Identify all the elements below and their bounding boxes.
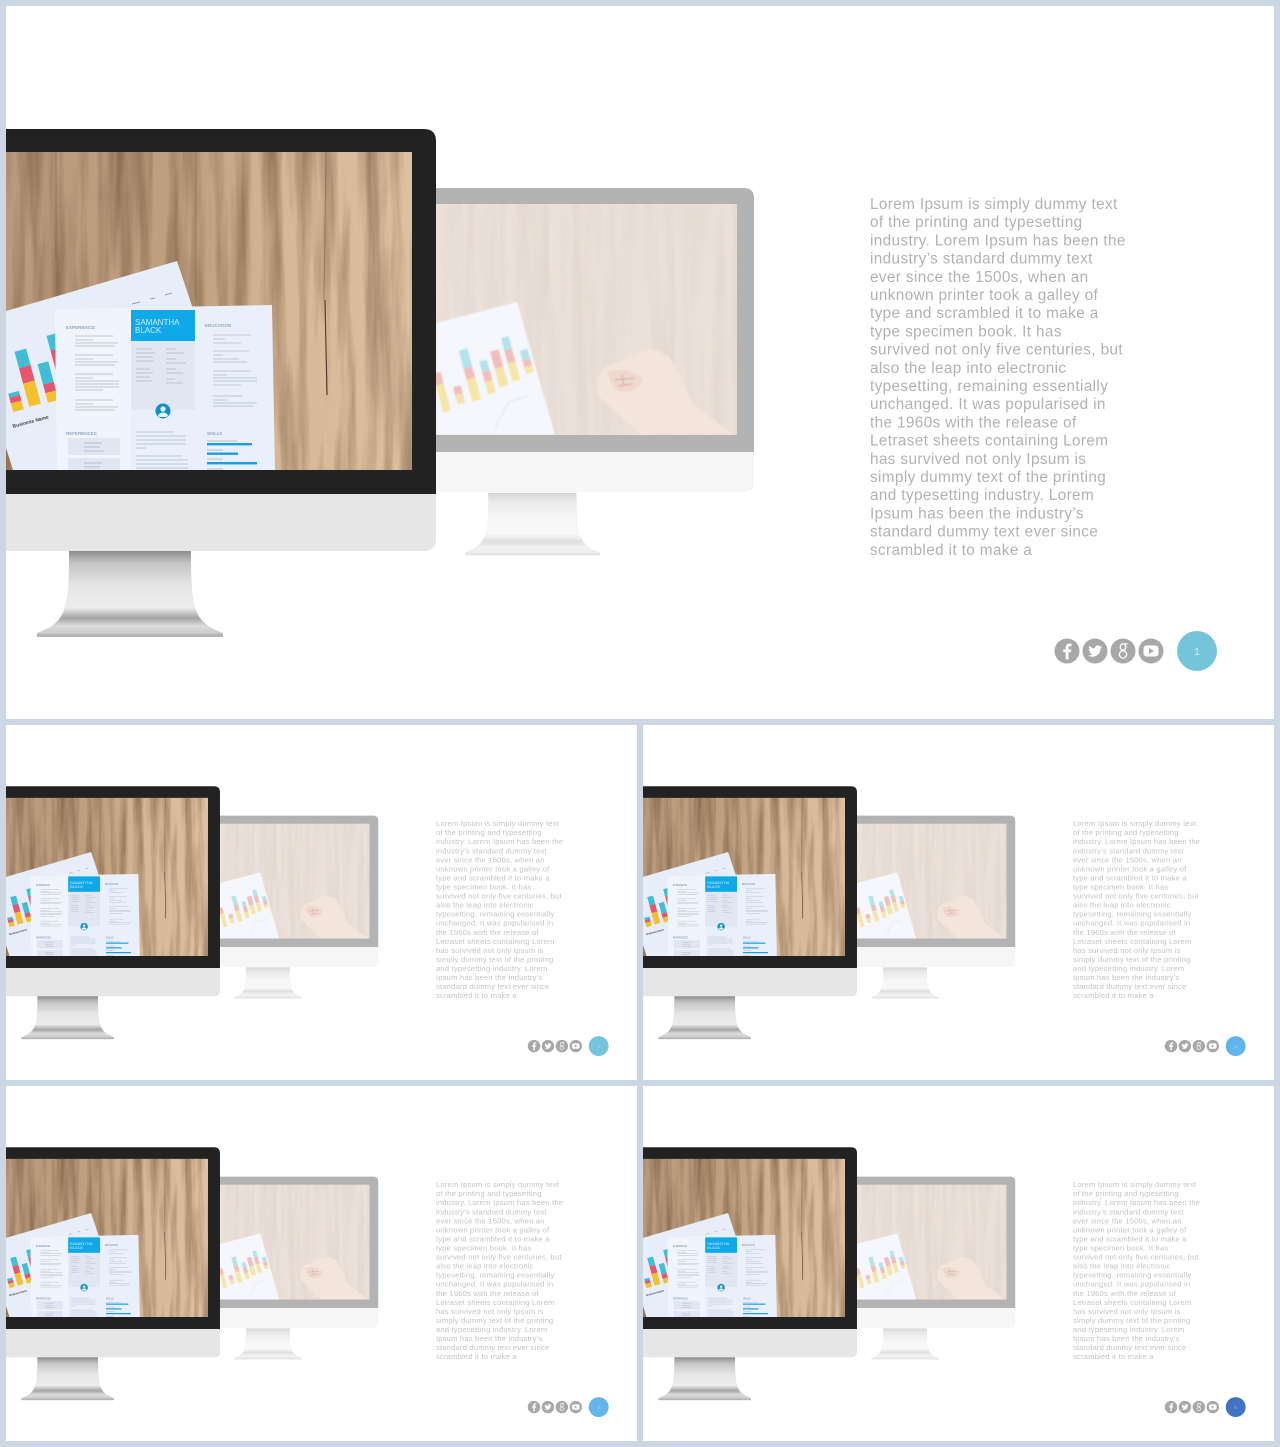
text block: has survived not only Ipsum is [436, 946, 544, 955]
text block: scrambled it to make a [436, 991, 517, 1000]
text block: type and scrambled it to make a [870, 305, 1099, 322]
text block: also the leap into electronic [1073, 1262, 1171, 1271]
page badge [1226, 1397, 1246, 1417]
text block: has survived not only Ipsum is [436, 1307, 544, 1316]
text block: of the printing and typesetting [870, 214, 1082, 231]
text block: Lorem Ipsum is simply dummy text [436, 819, 560, 828]
page badge: 1 [1194, 647, 1200, 658]
text block: Lorem Ipsum is simply dummy text [870, 196, 1118, 213]
text block: simply dummy text of the printing [1073, 1316, 1190, 1325]
text block: the 1960s with the release of [436, 928, 539, 937]
icons: social media [528, 1040, 582, 1052]
text block: simply dummy text of the printing [436, 955, 553, 964]
text block: Ipsum has been the industry’s [436, 1334, 542, 1343]
monitors with wood desk photo [0, 786, 378, 1039]
text block: industry. Lorem Ipsum has been the [436, 837, 563, 846]
text block: industry’s standard dummy text [436, 846, 547, 855]
text block: survived not only five centuries, but [1073, 892, 1200, 901]
page badge [1177, 631, 1217, 671]
text block: also the leap into electronic [870, 360, 1066, 377]
text block: Lorem Ipsum is simply dummy text [1073, 1180, 1197, 1189]
text block: ever since the 1500s, when an [436, 1216, 545, 1225]
monitors with wood desk photo [635, 1147, 1015, 1400]
text block: industry’s standard dummy text [436, 1207, 547, 1216]
page badge: 5 [1234, 1405, 1237, 1411]
text block: simply dummy text of the printing [1073, 955, 1190, 964]
text block: and typesetting industry. Lorem [1073, 964, 1184, 973]
text block: industry’s standard dummy text [870, 251, 1093, 268]
panel: main slide [6, 6, 1274, 719]
text block: scrambled it to make a [1073, 991, 1154, 1000]
text block: type specimen book. It has [870, 323, 1062, 340]
text block: industry. Lorem Ipsum has been the [1073, 837, 1200, 846]
text block: unchanged. It was popularised in [1073, 919, 1190, 928]
text block: survived not only five centuries, but [1073, 1253, 1200, 1262]
text block: typesetting, remaining essentially [870, 378, 1108, 395]
text block: standard dummy text ever since [436, 1343, 549, 1352]
text block: unchanged. It was popularised in [436, 919, 553, 928]
text block: type specimen book. It has [1073, 1244, 1168, 1253]
text block: industry’s standard dummy text [1073, 1207, 1184, 1216]
text block: typesetting, remaining essentially [1073, 1271, 1191, 1280]
text block: simply dummy text of the printing [870, 469, 1106, 486]
text block: typesetting, remaining essentially [1073, 910, 1191, 919]
text block: also the leap into electronic [1073, 901, 1171, 910]
text block: unchanged. It was popularised in [870, 396, 1106, 413]
text block: has survived not only Ipsum is [1073, 946, 1181, 955]
text block: scrambled it to make a [436, 1352, 517, 1361]
text block: typesetting, remaining essentially [436, 910, 554, 919]
text block: type and scrambled it to make a [1073, 1234, 1187, 1243]
text block: unchanged. It was popularised in [436, 1280, 553, 1289]
text block: typesetting, remaining essentially [436, 1271, 554, 1280]
text block: survived not only five centuries, but [436, 892, 563, 901]
text block: type specimen book. It has [436, 1244, 531, 1253]
text block: the 1960s with the release of [870, 414, 1077, 431]
text block: unchanged. It was popularised in [1073, 1280, 1190, 1289]
text block: Ipsum has been the industry’s [870, 505, 1084, 522]
text block: Letraset sheets containing Lorem [436, 1298, 555, 1307]
text block: scrambled it to make a [870, 542, 1032, 559]
monitors with wood desk photo [0, 129, 754, 637]
text block: of the printing and typesetting [436, 828, 542, 837]
icons: social media [528, 1401, 582, 1413]
page badge: 4 [597, 1405, 600, 1411]
text block: Lorem Ipsum is simply dummy text [1073, 819, 1197, 828]
text block: survived not only five centuries, but [870, 342, 1123, 359]
icons: social media [1165, 1040, 1219, 1052]
text block: unknown printer took a galley of [1073, 1225, 1187, 1234]
text block: unknown printer took a galley of [870, 287, 1099, 304]
text block: of the printing and typesetting [1073, 1189, 1179, 1198]
text block: type and scrambled it to make a [436, 873, 550, 882]
panel: slide 5 [643, 1086, 1274, 1441]
text block: unknown printer took a galley of [436, 1225, 550, 1234]
text block: unknown printer took a galley of [1073, 864, 1187, 873]
text block: also the leap into electronic [436, 901, 534, 910]
text block: Letraset sheets containing Lorem [1073, 1298, 1192, 1307]
text block: simply dummy text of the printing [436, 1316, 553, 1325]
text block: and typesetting industry. Lorem [436, 964, 547, 973]
text block: Letraset sheets containing Lorem [1073, 937, 1192, 946]
text block: unknown printer took a galley of [436, 864, 550, 873]
text block: industry. Lorem Ipsum has been the [436, 1198, 563, 1207]
text block: type specimen book. It has [1073, 883, 1168, 892]
text block: the 1960s with the release of [1073, 928, 1176, 937]
text block: standard dummy text ever since [1073, 1343, 1186, 1352]
text block: the 1960s with the release of [1073, 1289, 1176, 1298]
icons: social media [1054, 638, 1164, 664]
page badge [1226, 1036, 1246, 1056]
text block: and typesetting industry. Lorem [870, 487, 1094, 504]
text block: Ipsum has been the industry’s [1073, 973, 1179, 982]
panel: slide 2 [6, 725, 637, 1080]
text block: the 1960s with the release of [436, 1289, 539, 1298]
text block: Ipsum has been the industry’s [436, 973, 542, 982]
text block: type and scrambled it to make a [436, 1234, 550, 1243]
text block: ever since the 1500s, when an [870, 269, 1089, 286]
text block: scrambled it to make a [1073, 1352, 1154, 1361]
text block: survived not only five centuries, but [436, 1253, 563, 1262]
text block: has survived not only Ipsum is [870, 451, 1086, 468]
page badge [589, 1036, 609, 1056]
text block: industry’s standard dummy text [1073, 846, 1184, 855]
panel: slide 3 [643, 725, 1274, 1080]
text block: ever since the 1500s, when an [1073, 1216, 1182, 1225]
text block: has survived not only Ipsum is [1073, 1307, 1181, 1316]
text block: and typesetting industry. Lorem [1073, 1325, 1184, 1334]
text block: standard dummy text ever since [870, 524, 1098, 541]
page badge: 3 [1234, 1044, 1237, 1050]
text block: standard dummy text ever since [1073, 982, 1186, 991]
monitors with wood desk photo [635, 786, 1015, 1039]
text block: of the printing and typesetting [436, 1189, 542, 1198]
text block: standard dummy text ever since [436, 982, 549, 991]
page badge [589, 1397, 609, 1417]
panel: slide 4 [6, 1086, 637, 1441]
text block: type specimen book. It has [436, 883, 531, 892]
text block: industry. Lorem Ipsum has been the [1073, 1198, 1200, 1207]
text block: and typesetting industry. Lorem [436, 1325, 547, 1334]
page badge: 2 [597, 1044, 600, 1050]
text block: Letraset sheets containing Lorem [870, 433, 1108, 450]
text block: Ipsum has been the industry’s [1073, 1334, 1179, 1343]
text block: ever since the 1500s, when an [436, 855, 545, 864]
text block: of the printing and typesetting [1073, 828, 1179, 837]
text block: Letraset sheets containing Lorem [436, 937, 555, 946]
text block: industry. Lorem Ipsum has been the [870, 232, 1126, 249]
monitors with wood desk photo [0, 1147, 378, 1400]
text block: also the leap into electronic [436, 1262, 534, 1271]
text block: type and scrambled it to make a [1073, 873, 1187, 882]
text block: ever since the 1500s, when an [1073, 855, 1182, 864]
text block: Lorem Ipsum is simply dummy text [436, 1180, 560, 1189]
icons: social media [1165, 1401, 1219, 1413]
